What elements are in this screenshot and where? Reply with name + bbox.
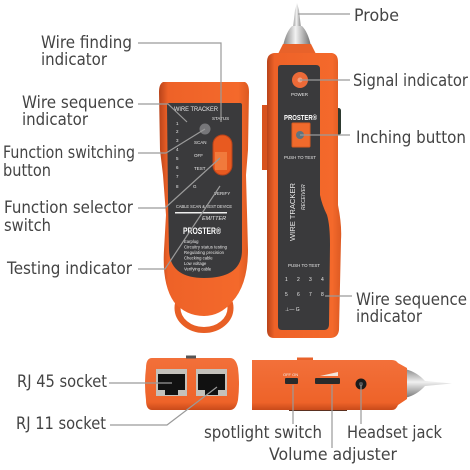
emitter panel text: 2: [176, 129, 179, 134]
receiver wire numbers: 7: [309, 292, 312, 298]
receiver wire numbers: 6: [297, 292, 300, 298]
top nub: [297, 358, 313, 360]
label: wire sequence indicator: indicator: [22, 110, 88, 129]
label: wire sequence indicator: [22, 93, 134, 129]
emitter panel text: SCAN: [194, 140, 207, 145]
label: right wire sequence indicator: [356, 290, 467, 326]
receiver wire numbers: 1: [285, 277, 288, 283]
volume wheel: [315, 372, 340, 384]
emitter panel text: CABLE SCAN & TEST DEVICE: [176, 204, 232, 209]
receiver probe: [278, 3, 316, 54]
label: function switching button: button: [3, 161, 51, 180]
receiver vertical text: WIRE TRACKER: [288, 182, 297, 241]
emitter panel text: STATUS: [212, 116, 229, 121]
power indicator: [291, 72, 309, 97]
RJ11 port: [196, 369, 227, 396]
receiver wire numbers: 2: [297, 277, 300, 283]
receiver side view: [252, 358, 452, 411]
emitter panel text: 3: [176, 138, 179, 143]
emitter panel text: 1: [176, 121, 179, 126]
emitter panel text: Low voltage: [184, 261, 207, 266]
label: RJ 11 socket: RJ 11 socket: [16, 414, 106, 433]
label: function selector switch: Function selector: [4, 198, 133, 217]
label: wire finding indicator: indicator: [41, 50, 107, 69]
headset jack: [356, 378, 366, 390]
emitter panel text: Earplug: [184, 239, 199, 244]
receiver body: [267, 53, 341, 338]
receiver vertical text: [288, 182, 307, 241]
receiver side clip: [262, 105, 268, 170]
side body: [252, 360, 407, 410]
spotlight switch: OFF ON: [283, 372, 298, 377]
bottom bulge: [289, 408, 347, 411]
emitter panel text: VERIFY: [214, 191, 230, 196]
spotlight switch: [283, 372, 298, 384]
status indicator: [200, 124, 210, 134]
RJ45 port: [156, 369, 187, 396]
receiver dark panel: [278, 65, 330, 330]
emitter panel text: [174, 107, 232, 272]
emitter device: [159, 82, 249, 330]
label: function selector switch: [4, 198, 133, 235]
emitter panel text: G: [193, 184, 197, 189]
label: probe: Probe: [354, 6, 399, 25]
emitter panel text: Verifying cable: [184, 266, 212, 272]
receiver wire numbers: [285, 263, 324, 313]
socket housing: [145, 358, 239, 410]
receiver device: [262, 3, 341, 338]
receiver wire numbers: PUSH TO TEST: [288, 263, 320, 268]
selector switch: [213, 135, 232, 175]
emitter hanging ring: [178, 286, 230, 330]
label: function switching button: Function switching: [3, 143, 135, 162]
socket end view: [145, 356, 239, 410]
receiver wire numbers: 3: [309, 277, 312, 283]
label: testing indicator: Testing indicator: [6, 259, 132, 278]
emitter panel text: PROSTER®: [183, 226, 221, 236]
emitter panel text: OFF: [194, 153, 203, 158]
label: function switching button: [3, 143, 135, 180]
emitter panel text: Checking cable: [184, 256, 213, 260]
emitter panel text: 7: [176, 174, 179, 179]
emitter dark panel: [167, 103, 242, 278]
label: right wire sequence indicator: indicator: [356, 307, 422, 326]
label: spotlight switch: spotlight switch: [204, 423, 322, 442]
label: wire finding indicator: Wire finding: [41, 33, 132, 52]
receiver side knob: [336, 108, 341, 135]
label: function selector switch: switch: [4, 216, 51, 235]
receiver wire numbers: 8: [321, 292, 324, 298]
receiver vertical text: RECEIVER: [301, 184, 307, 210]
emitter panel text: 4: [176, 147, 179, 152]
power indicator: POWER: [291, 92, 309, 97]
emitter panel text: 8: [176, 184, 179, 189]
label: wire finding indicator: [41, 33, 132, 69]
receiver wire numbers: 4: [321, 277, 324, 283]
inching button: [284, 123, 316, 160]
emitter panel text: WIRE TRACKER: [174, 107, 219, 113]
side probe tip: [405, 369, 452, 398]
emitter panel text: 6: [176, 165, 179, 170]
label: RJ 45 socket: RJ 45 socket: [17, 372, 107, 391]
receiver brand: PROSTER®: [284, 114, 318, 122]
top switch nub: [186, 356, 196, 358]
receiver wire numbers: 5: [285, 292, 288, 298]
label: wire sequence indicator: Wire sequence: [22, 93, 134, 112]
inching button: PUSH TO TEST: [284, 155, 316, 160]
emitter panel text: Regulating precision: [184, 250, 225, 255]
leader lines: [109, 14, 361, 448]
emitter panel text: EMITTER: [202, 216, 226, 222]
emitter panel text: TEST: [194, 166, 206, 171]
emitter panel text: Circuitry status testing: [184, 244, 228, 250]
receiver wire numbers: ⊥— G: [285, 307, 300, 313]
emitter body: [159, 82, 249, 316]
emitter panel text: 5: [176, 156, 179, 161]
label: volume adjuster: Volume adjuster: [269, 445, 397, 464]
label: headset jack: Headset jack: [347, 423, 442, 442]
